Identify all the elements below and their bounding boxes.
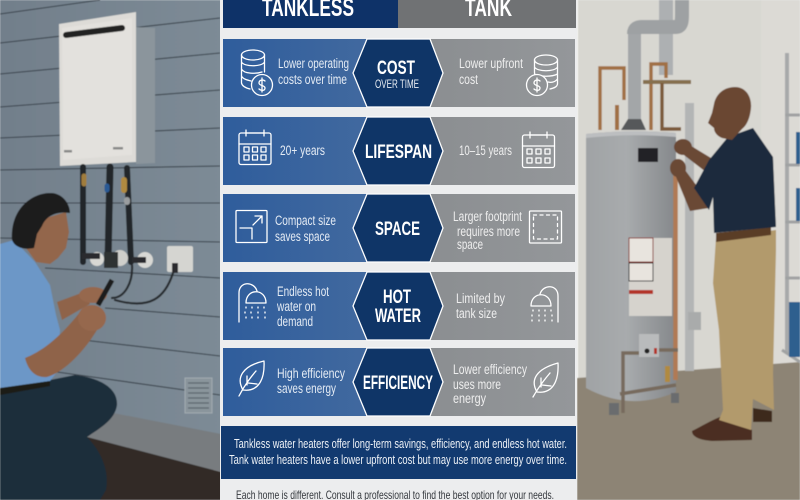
tankless cell bbox=[223, 194, 367, 262]
basement wall bbox=[576, 0, 800, 380]
tankless text line 2: costs over time bbox=[278, 72, 347, 87]
tank cell bbox=[430, 39, 575, 107]
tank text: 10–15 years bbox=[459, 143, 512, 158]
category label: LIFESPAN bbox=[365, 142, 432, 163]
lower arm bbox=[25, 312, 97, 377]
tankless text line 2: saves space bbox=[275, 229, 330, 244]
tank text line 2: tank size bbox=[456, 306, 497, 321]
tankless unit bbox=[59, 12, 155, 166]
head bbox=[708, 87, 751, 140]
tankless text: High efficiency bbox=[277, 366, 345, 381]
hair bbox=[12, 193, 70, 249]
shirt bbox=[0, 240, 60, 388]
concrete floor bbox=[577, 362, 800, 500]
bottom plumbing and control bbox=[609, 312, 701, 415]
icon: leaf right bbox=[533, 363, 558, 397]
tankless text line 2: saves energy bbox=[277, 381, 336, 396]
tankless text line 2: water on bbox=[276, 299, 316, 314]
warning labels bbox=[629, 238, 672, 316]
arms bbox=[680, 141, 711, 172]
photo: tank heater being serviced indoors bbox=[576, 0, 800, 500]
wall fittings and outlet bbox=[82, 246, 193, 273]
icon: shower right bbox=[531, 287, 558, 322]
pants bbox=[713, 230, 776, 430]
icon: leaf left bbox=[239, 361, 264, 396]
face and neck bbox=[26, 212, 69, 264]
category hexagon bbox=[353, 272, 443, 340]
ground bbox=[0, 437, 221, 500]
hands bbox=[79, 287, 107, 303]
copper lines bbox=[600, 64, 691, 130]
photo: tankless heater being serviced outdoors bbox=[0, 0, 221, 500]
hands bbox=[674, 139, 692, 155]
category label: HOT bbox=[383, 287, 411, 308]
category hexagon bbox=[353, 194, 443, 262]
tank cell bbox=[430, 348, 575, 416]
tank cell bbox=[430, 272, 575, 340]
category hexagon bbox=[353, 39, 443, 107]
wire shelf and bins bbox=[782, 53, 800, 362]
category label line 2: WATER bbox=[375, 306, 421, 327]
tankless cell bbox=[223, 39, 367, 107]
header: tank bbox=[398, 0, 576, 28]
row: hot water bbox=[223, 272, 575, 340]
tankless text: Lower operating bbox=[278, 56, 349, 71]
category label: EFFICIENCY bbox=[363, 373, 433, 394]
tank text line 2: requires more bbox=[457, 224, 520, 239]
tool bbox=[98, 280, 112, 305]
belt bbox=[0, 381, 50, 395]
icon: calendar left bbox=[239, 130, 271, 164]
tank text: Larger footprint bbox=[453, 209, 522, 224]
tankless cell bbox=[223, 272, 367, 340]
tank cell bbox=[430, 117, 575, 185]
icon: calendar right bbox=[522, 132, 554, 168]
header: tankless bbox=[223, 0, 398, 28]
upper forearm bbox=[57, 292, 90, 320]
copper riser on tank bbox=[673, 170, 678, 380]
siding lines bbox=[0, 0, 220, 395]
summary banner bbox=[221, 426, 576, 479]
category label: SPACE bbox=[375, 219, 420, 240]
tank text line 3: space bbox=[457, 237, 483, 252]
icon: compact arrow bbox=[236, 210, 267, 242]
tank text line 2: uses more bbox=[453, 377, 501, 392]
row: cost bbox=[223, 39, 575, 107]
comparison panel bbox=[220, 0, 577, 500]
tankless text line 3: demand bbox=[277, 314, 313, 329]
water pipes and fittings bbox=[83, 167, 173, 304]
icon: coins right bbox=[526, 55, 558, 96]
water heater tank bbox=[586, 131, 676, 401]
foundation bbox=[87, 413, 221, 472]
icon: shower left bbox=[239, 284, 266, 322]
shirt bbox=[694, 128, 776, 233]
tank text: Lower efficiency bbox=[453, 362, 527, 377]
tank text line 2: cost bbox=[459, 72, 478, 87]
tankless cell bbox=[223, 348, 367, 416]
category sublabel: OVER TIME bbox=[375, 79, 419, 91]
summary line 2: Tank water heaters have a lower upfront cost but may use more energy over time. bbox=[229, 452, 567, 467]
pants bbox=[0, 375, 117, 500]
tank cell bbox=[430, 194, 575, 262]
category label: COST bbox=[377, 58, 415, 79]
tankless cell bbox=[223, 117, 367, 185]
row: space bbox=[223, 194, 575, 262]
vent and conduit pipes bbox=[621, 0, 694, 371]
shoes bbox=[753, 408, 772, 422]
row: efficiency bbox=[223, 348, 575, 416]
tank text: Lower upfront bbox=[459, 56, 523, 71]
tankless text: Endless hot bbox=[277, 284, 329, 299]
technician kneeling bbox=[0, 193, 117, 500]
category hexagon bbox=[353, 348, 443, 416]
category hexagon bbox=[353, 117, 443, 185]
technician standing bbox=[670, 87, 776, 441]
summary line 1: Tankless water heaters offer long-term savings, efficiency, and endless hot water. bbox=[234, 436, 567, 451]
panel background bbox=[220, 0, 577, 500]
wall vent bbox=[185, 378, 212, 413]
row: lifespan bbox=[223, 117, 575, 185]
tank text line 3: energy bbox=[453, 391, 486, 406]
tankless text: Compact size bbox=[275, 213, 336, 228]
tank text: Limited by bbox=[456, 291, 505, 306]
siding wall bbox=[0, 0, 221, 470]
icon: coins left bbox=[242, 50, 272, 96]
belt bbox=[716, 227, 771, 242]
tankless text: 20+ years bbox=[280, 143, 325, 158]
icon: dashed footprint bbox=[530, 211, 562, 243]
